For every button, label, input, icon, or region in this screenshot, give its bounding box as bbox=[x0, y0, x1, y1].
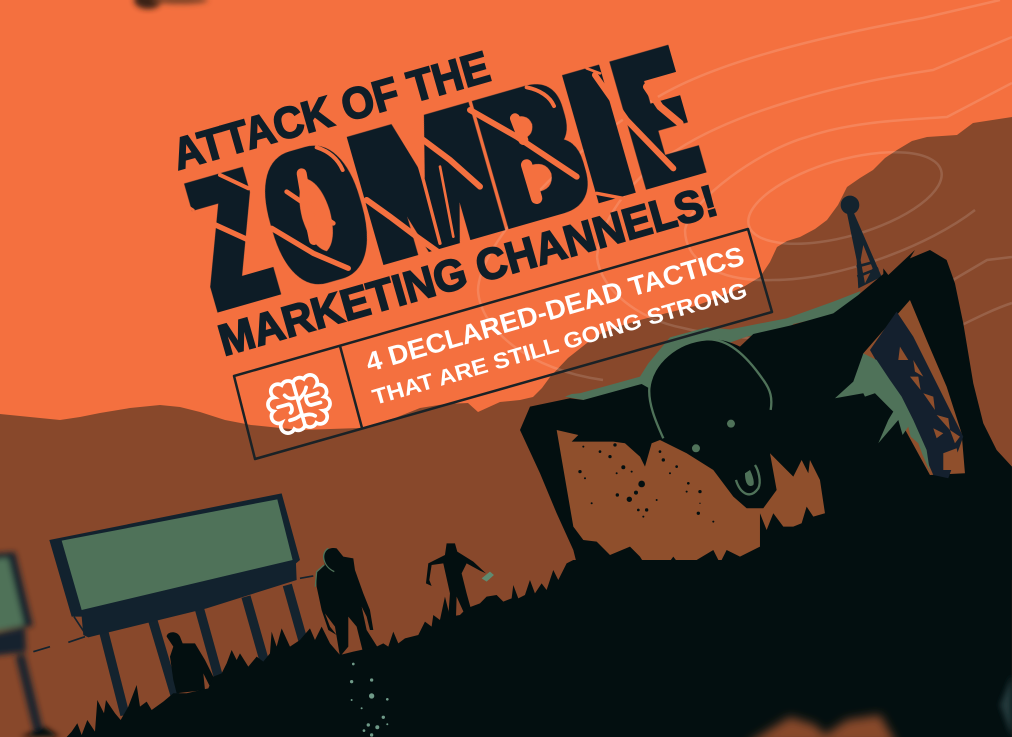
eyes bbox=[692, 420, 735, 452]
blurred billboard left bbox=[0, 552, 60, 737]
blurred foreground grass bottom bbox=[745, 715, 897, 737]
title: zombie: Z bbox=[177, 135, 286, 345]
subtitle box: THAT ARE STILL GOING STRONG bbox=[369, 277, 750, 410]
title: zombie: B bbox=[462, 43, 603, 263]
grassy hillside bbox=[67, 560, 1012, 737]
zombie silhouette right with axe bbox=[426, 543, 494, 618]
tower mast bbox=[841, 196, 882, 288]
blurred teal fragment right bbox=[1000, 675, 1012, 737]
icon: brain bbox=[263, 371, 335, 437]
blood drips bbox=[350, 663, 389, 737]
giant zombie bbox=[520, 250, 1012, 580]
title: zombie: E bbox=[602, 13, 712, 223]
subtitle text: 4 DECLARED-DEAD TACTICS bbox=[362, 241, 747, 378]
billboard bbox=[33, 493, 313, 715]
title: attack of the: ATTACK OF THE bbox=[167, 42, 495, 180]
zombie silhouette small left bbox=[167, 632, 215, 693]
brown patch under chest bbox=[557, 430, 825, 570]
zombie claw cracks right bbox=[410, 68, 680, 237]
body silhouette bbox=[520, 250, 1012, 580]
green head outline bbox=[649, 339, 771, 438]
zombie claw cracks left bbox=[183, 145, 440, 268]
subtitle box bbox=[234, 229, 772, 459]
zombie silhouette middle bbox=[315, 548, 378, 657]
title: zombie: I bbox=[550, 29, 648, 237]
lower tower bbox=[870, 312, 963, 478]
title: zombie: O bbox=[247, 105, 386, 324]
radio waves bbox=[478, 0, 1012, 380]
tattered green shirt bbox=[835, 353, 930, 472]
tower window bbox=[863, 300, 965, 475]
blood speckles bbox=[578, 443, 714, 523]
left ground and grass bbox=[33, 493, 1012, 737]
blurred foreground fragment top bbox=[134, 0, 208, 9]
billboard frame bbox=[49, 493, 300, 637]
mouth teeth bbox=[736, 465, 760, 494]
green shoulder rim bbox=[565, 291, 861, 400]
billboard screen bbox=[62, 499, 293, 610]
title: zombie bbox=[176, 11, 712, 346]
billboard legs bbox=[103, 585, 303, 715]
title: zombie: M bbox=[335, 69, 518, 300]
title: marketing channels: MARKETING CHANNELS! bbox=[213, 176, 723, 366]
